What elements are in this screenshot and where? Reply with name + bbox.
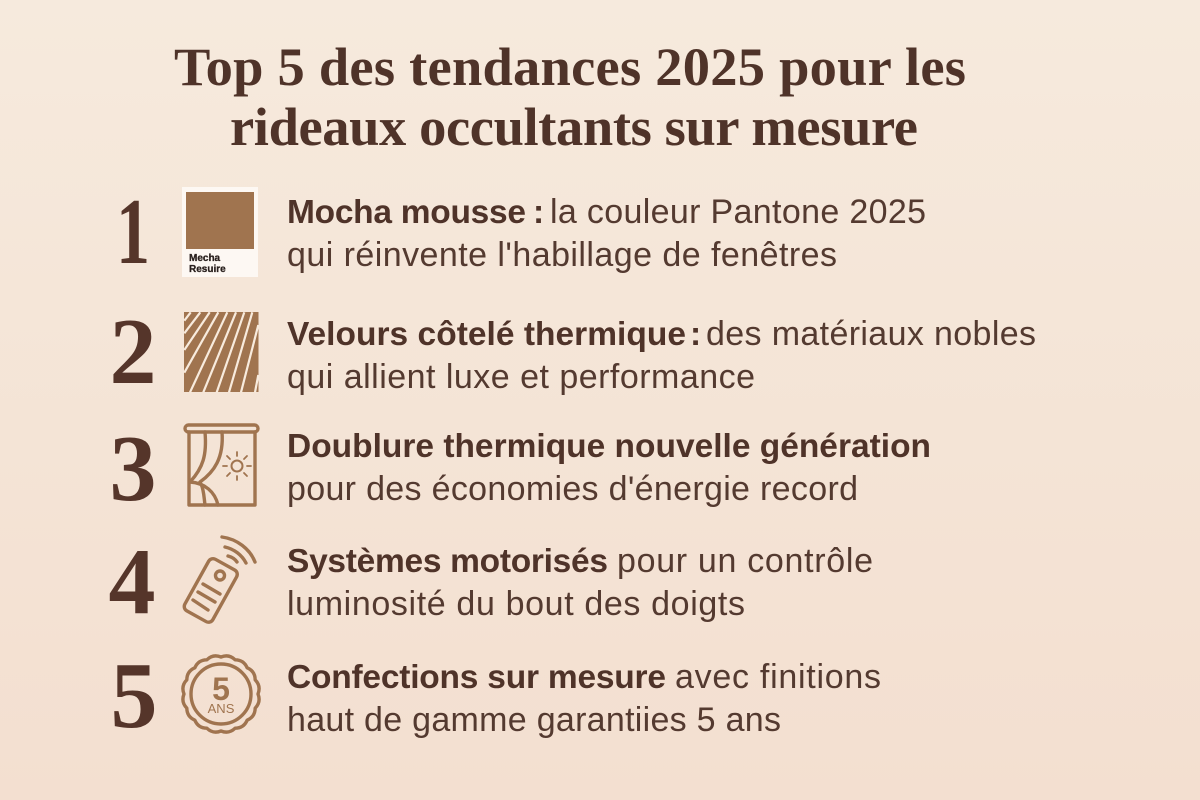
icon: 5-year guarantee seal: ANS bbox=[208, 701, 235, 716]
icon: 5-year guarantee seal bbox=[183, 656, 259, 732]
text: trend 1: Mocha mousse bbox=[287, 194, 526, 231]
icon: corduroy velvet texture bbox=[184, 312, 258, 392]
icon: colour swatch: Resuire bbox=[189, 264, 226, 275]
text: trend 5: Confections sur mesure bbox=[287, 659, 666, 696]
trend 3 bbox=[110, 417, 931, 521]
icon: colour swatch bbox=[182, 187, 258, 277]
text: trend 1: : bbox=[533, 194, 544, 231]
text: trend 3: Doublure thermique nouvelle génération bbox=[287, 428, 931, 465]
text: trend 2: des matériaux nobles bbox=[706, 315, 1036, 353]
trend 1 bbox=[116, 179, 926, 284]
title bbox=[174, 36, 966, 157]
number 2: 2 bbox=[110, 300, 156, 404]
text: trend 2 bbox=[287, 315, 1036, 396]
title: Top 5 des tendances 2025 pour les bbox=[174, 36, 966, 97]
text: trend 5: avec finitions bbox=[675, 658, 881, 696]
text: trend 2: qui allient luxe et performance bbox=[287, 358, 755, 396]
text: trend 4: luminosité du bout des doigts bbox=[287, 585, 745, 623]
icon: colour swatch: Mecha bbox=[189, 253, 221, 264]
text: trend 2: : bbox=[690, 316, 701, 353]
text: trend 4: Systèmes motorisés bbox=[287, 543, 608, 580]
text: trend 1: la couleur Pantone 2025 bbox=[550, 193, 926, 231]
number 4: 4 bbox=[108, 530, 156, 634]
text: trend 5: haut de gamme garantiies 5 ans bbox=[287, 701, 781, 739]
number 1: 1 bbox=[116, 179, 150, 284]
icon: 5-year guarantee seal: 5 bbox=[212, 671, 230, 707]
text: trend 3: pour des économies d'énergie record bbox=[287, 470, 858, 508]
text: trend 1 bbox=[287, 193, 926, 274]
text: trend 4 bbox=[287, 542, 873, 623]
text: trend 4: pour un contrôle bbox=[617, 542, 873, 580]
trend 4 bbox=[108, 530, 873, 634]
number 3: 3 bbox=[110, 417, 156, 521]
text: trend 5 bbox=[287, 658, 881, 739]
icon: curtain window with sun bbox=[185, 425, 258, 505]
text: trend 1: qui réinvente l'habillage de fenêtres bbox=[287, 236, 837, 274]
text: trend 3 bbox=[287, 428, 931, 508]
text: trend 2: Velours côtelé thermique bbox=[287, 316, 686, 353]
title: rideaux occultants sur mesure bbox=[230, 96, 918, 157]
number 5: 5 bbox=[110, 644, 158, 748]
trend 2 bbox=[110, 300, 1036, 404]
trend 5 bbox=[110, 644, 881, 748]
icon: remote control with signal bbox=[182, 537, 255, 624]
